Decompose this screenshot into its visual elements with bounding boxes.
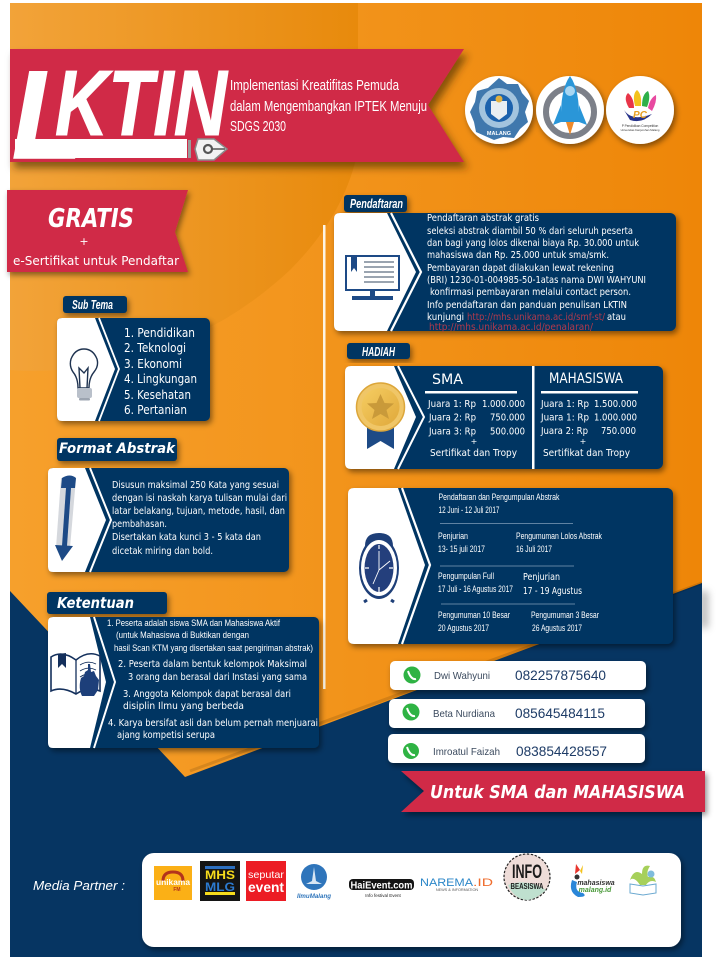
- heading: Pendaftaran: [344, 195, 407, 212]
- text: atau: [607, 312, 626, 323]
- GRATIS banner: GRATIS: [48, 204, 134, 234]
- text: disiplin Ilmu yang berbeda: [123, 701, 244, 712]
- text: hasil Scan KTM yang disertakan saat pengiriman abstrak): [114, 643, 313, 653]
- column: SMA: 500.000: [490, 426, 525, 438]
- icon: clock: [359, 533, 399, 602]
- text: [112, 480, 287, 557]
- subtitle: [230, 77, 427, 135]
- heading: Ketentuan: Ketentuan: [57, 594, 134, 612]
- text: konfirmasi pembayaran melalui contact person.: [430, 287, 631, 298]
- text: latar belakang, tujuan, metode, hasil, dan: [112, 506, 285, 517]
- contact: Dwi Wahyuni: Dwi Wahyuni: [434, 670, 490, 682]
- logo: MHS MLG: MHS: [205, 868, 235, 882]
- contact: Beta Nurdiana: 085645484115: [515, 705, 605, 721]
- contact: Imroatul Faizah: [388, 734, 645, 763]
- text: [107, 618, 318, 741]
- logo: NAREMA.ID: .ID: [473, 877, 493, 889]
- heading: Sub Tema: Sub Tema: [72, 297, 113, 312]
- schedule text: Penjurian: [438, 531, 468, 541]
- heading: Sub Tema: [63, 296, 127, 313]
- subtitle: Implementasi Kreatifitas Pemuda: [230, 77, 399, 94]
- text: Disertakan kata kunci 3 - 5 kata dan: [112, 532, 261, 543]
- panel: Format Abstrak: [48, 468, 289, 572]
- icon: pencil: [55, 476, 76, 561]
- logo: mahasiswa malang: [571, 864, 615, 897]
- column: SMA: Sertifikat dan Tropy: [430, 448, 517, 459]
- text: http://mhs.unikama.ac.id/penalaran/: [429, 322, 594, 333]
- logo: NAREMA.ID: NEWS & INFORMATION: [436, 888, 478, 892]
- subtitle: dalam Mengembangkan IPTEK Menuju: [230, 98, 427, 115]
- logo: ilmu malang: [297, 864, 331, 900]
- panel: schedule: [348, 488, 673, 644]
- logo: HaiEvent.com: [349, 879, 414, 898]
- logo: PC: P Pendidikan Competition: [622, 124, 659, 128]
- logo: mahasiswa malang: malang.id: [579, 887, 612, 894]
- list: 6. Pertanian: [124, 403, 187, 417]
- schedule text: 13- 15 juli 2017: [438, 544, 485, 554]
- icon: book: [51, 653, 100, 696]
- text: dengan isi naskah karya tulisan mulai dari: [112, 493, 287, 504]
- text: 1. Peserta adalah siswa SMA dan Mahasiswa Aktif: [107, 618, 280, 628]
- list: 2. Teknologi: [124, 341, 186, 355]
- column: Mahasiswa: Sertifikat dan Tropy: [543, 448, 630, 459]
- text: 4. Karya bersifat asli dan belum pernah menjuarai: [108, 718, 318, 729]
- text: Pendaftaran abstrak gratis: [427, 213, 539, 224]
- logo: PC: PC: [633, 110, 648, 121]
- heading: Ketentuan: [47, 592, 167, 614]
- logo: NAREMA.ID: [420, 877, 493, 892]
- heading: Format Abstrak: Format Abstrak: [59, 441, 176, 457]
- icon: medal: [356, 383, 404, 449]
- list: 1. Pendidikan: [124, 326, 195, 340]
- panel: Pendaftaran: [334, 213, 676, 333]
- banner: Untuk SMA dan MAHASISWA: Untuk SMA dan MAHASISWA: [430, 782, 685, 803]
- schedule text: Penjurian: [523, 572, 560, 583]
- logo: unikama fm: FM: [173, 887, 181, 893]
- column: SMA: Juara 2: Rp: [428, 412, 476, 424]
- LKTIN logotype: KTIN: [55, 51, 228, 155]
- schedule text: Pengumuman 3 Besar: [531, 610, 599, 620]
- contact: Beta Nurdiana: Beta Nurdiana: [433, 708, 495, 720]
- icon: monitor: [346, 256, 399, 300]
- column: Mahasiswa: Juara 1: Rp: [540, 399, 589, 410]
- text: mahasiswa dan Rp. 25.000 untuk sma/smk.: [427, 250, 609, 261]
- column: SMA: 750.000: [490, 412, 525, 424]
- list: 3. Ekonomi: [124, 357, 182, 371]
- GRATIS banner: e-Sertifikat untuk Pendaftar: [13, 253, 180, 268]
- column: Mahasiswa: 1.500.000: [594, 399, 637, 410]
- logo: NAREMA.ID: NAREMA: [420, 877, 474, 889]
- column: SMA: 1.000.000: [482, 399, 525, 410]
- GRATIS banner: +: [79, 235, 89, 248]
- contact: Beta Nurdiana: [389, 699, 645, 728]
- logo: Info Beasiswa: [504, 854, 550, 900]
- schedule text: 20 Agustus 2017: [438, 623, 489, 633]
- heading: Format Abstrak: [57, 438, 177, 461]
- contact: Dwi Wahyuni: [390, 661, 646, 690]
- LKTIN logotype: L: [12, 46, 84, 185]
- logo: palm and book: [630, 866, 656, 895]
- schedule text: 12 Juni - 12 Juli 2017: [438, 505, 500, 515]
- schedule text: [438, 492, 602, 633]
- panel: Hadiah: [345, 366, 663, 469]
- icon: pen nib: [188, 139, 227, 160]
- panel: Ketentuan: [48, 617, 319, 748]
- icon: light bulb: [70, 349, 98, 400]
- logo: Info Beasiswa: INFO: [512, 862, 542, 883]
- logo: PC: Universitas Kanjuruhan Malang: [621, 128, 660, 132]
- logo: seputar event: event: [248, 880, 284, 895]
- text: Pembayaran dapat dilakukan lewat rekening: [427, 263, 614, 274]
- text: dicetak miring dan bold.: [112, 546, 213, 557]
- schedule text: 17 - 19 Agustus: [523, 586, 582, 597]
- column: SMA: Juara 3: Rp: [428, 426, 476, 438]
- contact: Imroatul Faizah: Imroatul Faizah: [433, 746, 500, 758]
- text: ajang kompetisi serupa: [117, 730, 215, 741]
- column: Mahasiswa: +: [580, 437, 586, 446]
- column: Mahasiswa: [540, 371, 638, 459]
- vertical divider: [323, 225, 326, 689]
- column: Mahasiswa: Juara 2: Rp: [540, 426, 588, 437]
- logo: HaiEvent.com: Info festival Event: [365, 893, 402, 898]
- text: Info pendaftaran dan panduan penulisan LKTIN: [427, 300, 627, 311]
- text: (BRI) 1230-01-004985-50-1atas nama DWI WAHYUNI: [427, 275, 646, 286]
- contact: Dwi Wahyuni: 082257875640: [515, 667, 606, 683]
- text: dan bagi yang lolos dikenai biaya Rp. 30.000 untuk: [427, 238, 639, 249]
- column: SMA: +: [471, 437, 477, 446]
- panel: media partners: [142, 853, 681, 947]
- column: SMA: SMA: [432, 372, 463, 388]
- list: 4. Lingkungan: [124, 372, 197, 386]
- logo: PC: [606, 76, 674, 144]
- heading: Pendaftaran: Pendaftaran: [350, 196, 403, 211]
- text: (untuk Mahasiswa di Buktikan dengan: [116, 630, 249, 640]
- schedule text: 26 Agustus 2017: [532, 623, 582, 633]
- logo: seputar event: seputar: [248, 869, 285, 881]
- text: pembahasan.: [112, 519, 167, 530]
- panel: Sub Tema: [57, 318, 210, 421]
- text: Disusun maksimal 250 Kata yang sesuai: [112, 480, 279, 491]
- subtitle: SDGS 2030: [230, 118, 286, 135]
- text: kunjungi: [427, 312, 464, 323]
- logo: unikama fm: [154, 866, 192, 900]
- logo: HaiEvent.com: HaiEvent.com: [350, 880, 413, 892]
- logo: unikama fm: unikama: [156, 878, 191, 887]
- heading: Hadiah: [347, 343, 410, 359]
- text: 2. Peserta dalam bentuk kelompok Maksimal: [118, 659, 307, 670]
- text: 3. Anggota Kelompok dapat berasal dari: [123, 689, 291, 700]
- column: SMA: Juara 1: Rp: [427, 399, 476, 410]
- contact: Imroatul Faizah: 083854428557: [516, 743, 607, 759]
- logo: MHS MLG: [200, 861, 240, 901]
- text: [427, 213, 646, 333]
- logo: Info Beasiswa: BEASISWA: [510, 882, 544, 891]
- logo: seputar event: [246, 861, 286, 901]
- logo: university: [465, 76, 533, 144]
- logo: rocket: [536, 76, 604, 144]
- logo: mahasiswa malang: mahasiswa: [577, 880, 615, 887]
- text: seleksi abstrak diambil 50 % dari seluruh peserta: [427, 226, 633, 237]
- schedule text: Pengumuman Lolos Abstrak: [516, 531, 602, 541]
- schedule text: 17 Juli - 16 Agustus 2017: [438, 584, 513, 594]
- schedule text: Pengumuman 10 Besar: [438, 610, 510, 620]
- list: [124, 326, 197, 417]
- list: 5. Kesehatan: [124, 388, 191, 402]
- column: Mahasiswa: 750.000: [601, 426, 636, 437]
- column: Mahasiswa: 1.000.000: [594, 412, 637, 424]
- column: Mahasiswa: MAHASISWA: [549, 371, 623, 387]
- GRATIS banner: [7, 190, 188, 272]
- schedule text: Pengumpulan Full: [438, 571, 494, 581]
- title banner: [10, 46, 464, 185]
- schedule text: 16 Juli 2017: [516, 544, 552, 554]
- divider: [532, 366, 534, 469]
- column: SMA: [425, 372, 525, 459]
- label: Media Partner: Media Partner :: [33, 878, 125, 893]
- schedule text: Pendaftaran dan Pengumpulan Abstrak: [438, 492, 560, 502]
- logo: ilmu malang: IlmuMalang: [297, 893, 331, 900]
- banner: Untuk SMA dan MAHASISWA: [401, 771, 705, 812]
- logo: MHS MLG: MLG: [205, 880, 235, 894]
- LKTIN logotype: [12, 46, 228, 185]
- column: Mahasiswa: Juara 1: Rp: [540, 412, 589, 424]
- heading: Hadiah: HADIAH: [362, 345, 396, 359]
- text: http://mhs.unikama.ac.id/smf-st/: [467, 312, 606, 323]
- logo: university: MALANG: [487, 131, 511, 137]
- text: 3 orang dan berasal dari Instasi yang sama: [128, 672, 307, 683]
